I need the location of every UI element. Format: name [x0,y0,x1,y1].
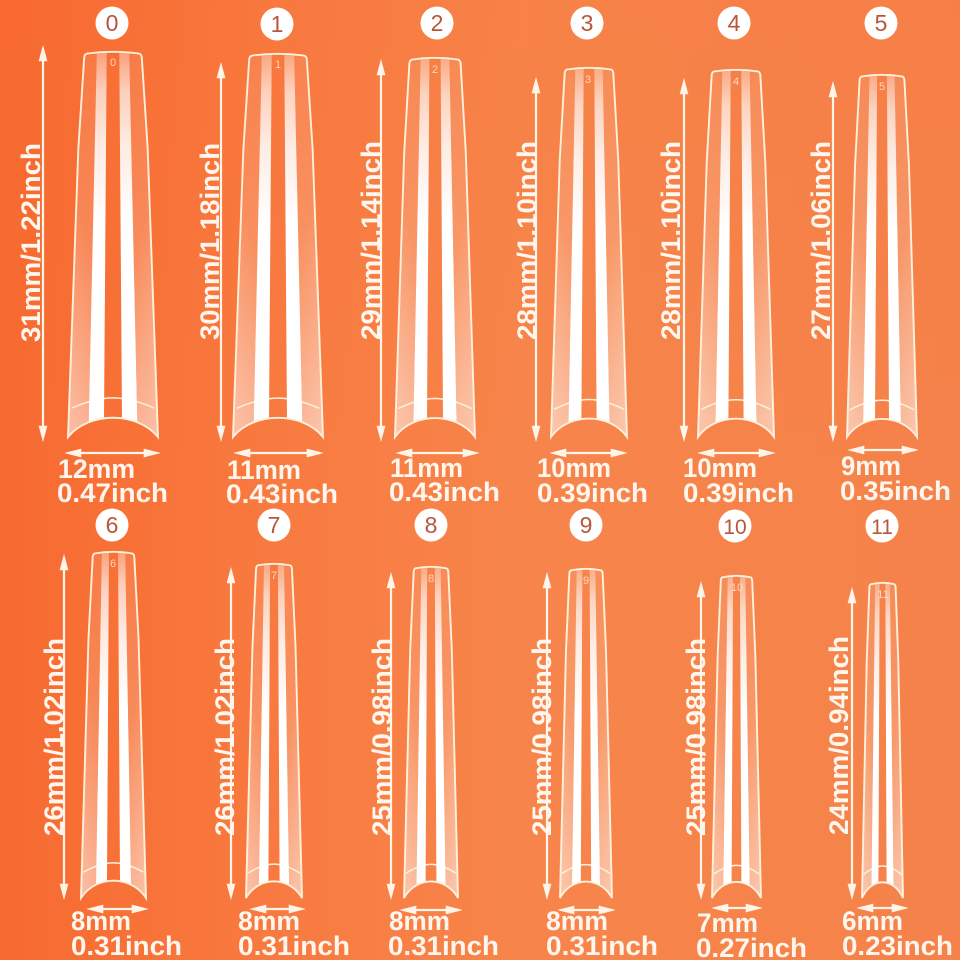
length label 8: 25mm/0.98inch [367,638,397,836]
width label 1: 0.43inch [226,479,338,509]
width label 4 [683,453,794,508]
width label 8: 8mm [389,906,450,936]
nail 1: 1 [275,59,281,71]
panel: size 4 [656,6,794,508]
panel: size 3 [512,6,648,508]
badge 10: 10 [723,516,747,539]
panel: size 10 [681,510,807,960]
length label 5: 27mm/1.06inch [806,141,836,340]
nail 5: 5 [879,81,885,93]
nail 6 [81,552,146,898]
width label 7: 8mm [238,906,300,936]
nail 10: 10 [731,582,743,594]
nail 11 [862,583,903,898]
width arrow 7 [250,905,305,913]
width label 2: 0.43inch [389,477,500,507]
badge 5: 5 [875,10,887,36]
badge 5 [864,6,898,40]
width label 5: 0.35inch [840,476,951,506]
width arrow 0 [65,449,160,457]
length label 9: 25mm/0.98inch [527,638,557,836]
length arrow 6 [60,555,68,899]
length arrow 8 [387,573,395,899]
nail 0 [68,52,158,437]
nail 4: 4 [733,76,739,88]
badge 9: 9 [580,512,592,538]
length label 10: 25mm/0.98inch [681,638,711,836]
badge 10 [718,510,752,542]
width label 3: 10mm [537,453,611,483]
width arrow 3 [550,449,627,457]
width label 1 [226,455,338,509]
nail 6: 6 [110,558,116,570]
width label 9 [546,906,658,960]
width label 0 [57,454,168,508]
panel: size 2 [356,6,500,507]
length label 6: 26mm/1.02inch [39,638,69,836]
width label 11: 6mm [842,906,903,936]
length label 4: 28mm/1.10inch [656,141,686,340]
badge 1: 1 [271,11,283,37]
width label 7 [238,906,350,960]
nail 0: 0 [110,57,116,69]
nail 9: 9 [583,575,589,587]
nail 7: 7 [271,570,277,582]
width arrow 10 [712,904,762,912]
length arrow 5 [829,82,837,441]
length arrow 9 [543,573,551,899]
badge 2 [420,6,454,40]
badge 3: 3 [581,10,593,36]
badge 8: 8 [425,512,437,538]
width label 3 [537,453,648,508]
nail 8: 8 [428,573,434,585]
badge 11 [866,510,898,542]
width label 2 [389,453,500,507]
width label 5: 9mm [841,451,901,481]
nail 3 [551,68,627,437]
badge 0 [96,6,128,40]
nail 4 [698,70,774,437]
badge 6: 6 [106,512,118,538]
badge 4: 4 [728,10,741,36]
length label 11: 24mm/0.94inch [824,636,854,835]
width label 10: 7mm [697,908,758,938]
panel: size 5 [806,6,951,506]
width label 5 [840,451,951,506]
nail 1 [233,54,323,437]
badge 7: 7 [268,512,280,538]
length label 2: 29mm/1.14inch [356,141,386,340]
panel: size 9 [527,508,658,960]
width label 6: 8mm [71,906,131,936]
width arrow 11 [857,904,908,912]
badge 4 [718,6,750,40]
length label 3: 28mm/1.10inch [512,141,542,340]
width label 1: 11mm [227,455,301,485]
width label 0: 12mm [58,454,135,484]
width label 3: 0.39inch [537,478,648,508]
width label 4: 10mm [683,453,757,483]
width arrow 2 [396,449,479,457]
nail 9 [560,569,612,898]
length arrow 4 [680,79,688,441]
width label 6 [71,906,182,960]
badge 3 [570,6,604,40]
width label 11 [842,906,953,960]
nail 5 [847,75,917,437]
width label 10 [696,908,807,960]
nail 7 [246,564,302,898]
panel: size 6 [39,508,182,960]
width label 8 [388,906,499,960]
width arrow 8 [400,906,462,914]
badge 9 [570,508,602,542]
badge 6 [96,508,128,542]
width arrow 4 [698,449,775,457]
width arrow 5 [848,446,918,454]
panel: size 11 [824,510,953,960]
width label 2: 11mm [390,453,463,483]
width label 4: 0.39inch [683,478,794,508]
badge 1 [260,8,294,40]
nail 11: 11 [877,589,889,601]
width arrow 6 [87,905,148,913]
length arrow 2 [377,60,385,441]
panel: size 8 [367,508,499,960]
width arrow 9 [558,906,615,914]
width label 0: 0.47inch [57,478,168,508]
nail 2: 2 [432,64,438,76]
badge 2: 2 [431,10,443,36]
nail 8 [404,567,458,898]
badge 0: 0 [106,10,118,36]
width arrow 1 [234,449,323,457]
panel: size 0 [16,6,168,508]
width label 9: 8mm [546,906,608,936]
panel: size 7 [210,508,350,960]
length label 0: 31mm/1.22inch [16,143,46,342]
length arrow 11 [848,588,856,899]
length arrow 0 [39,46,47,441]
badge 8 [414,508,448,542]
panel: size 1 [195,8,338,509]
length arrow 3 [532,78,540,441]
nail 3: 3 [585,74,591,86]
length label 7: 26mm/1.02inch [210,638,240,836]
length arrow 10 [697,582,705,899]
length arrow 1 [217,63,225,441]
badge 11: 11 [871,516,893,539]
nail 2 [395,58,475,437]
nail 10 [712,576,761,898]
badge 7 [258,508,290,542]
length label 1: 30mm/1.18inch [195,143,225,340]
length arrow 7 [227,568,235,899]
